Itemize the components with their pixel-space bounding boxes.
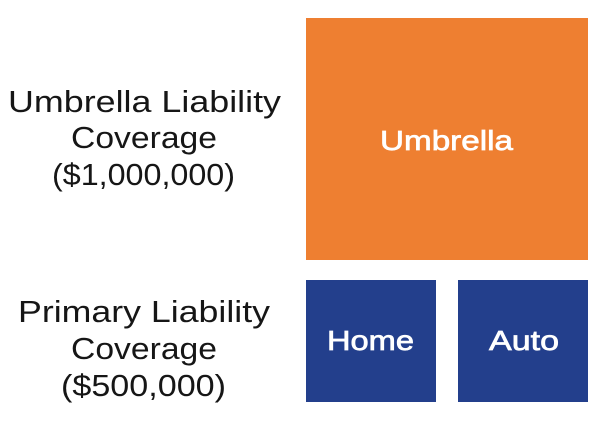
panel: umbrella	[306, 18, 588, 260]
label: primary liability coverage	[18, 295, 271, 403]
label: primary liability coverage: Primary Liability	[18, 295, 271, 329]
label: umbrella liability coverage: ($1,000,000)	[52, 158, 235, 192]
panel: home: Home	[327, 325, 414, 356]
panel: home	[306, 280, 436, 402]
label: umbrella liability coverage: Coverage	[71, 121, 217, 155]
label: umbrella liability coverage	[8, 85, 282, 192]
label: umbrella liability coverage: Umbrella Liability	[8, 85, 282, 119]
label: primary liability coverage: ($500,000)	[61, 369, 226, 403]
panel: auto: Auto	[489, 325, 559, 356]
label: primary liability coverage: Coverage	[71, 332, 217, 366]
panel: umbrella: Umbrella	[380, 125, 514, 156]
panel: auto	[458, 280, 588, 402]
